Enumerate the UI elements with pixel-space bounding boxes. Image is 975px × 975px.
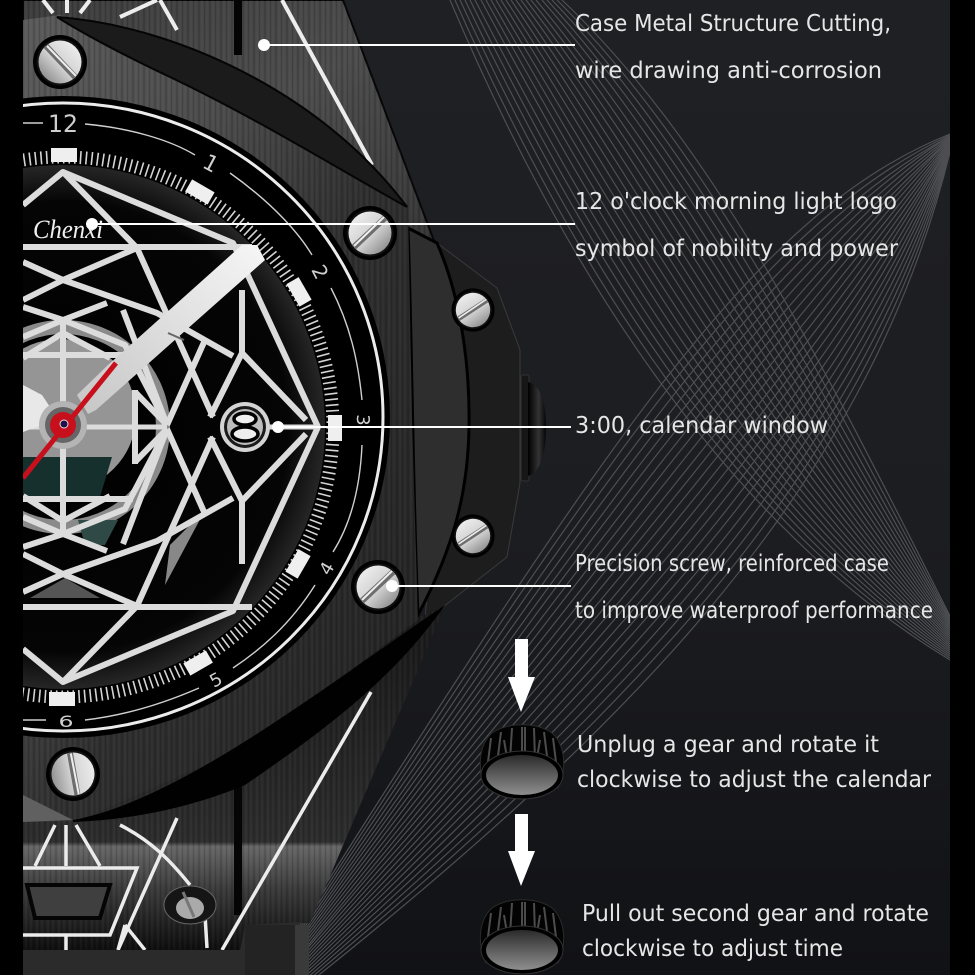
dial xyxy=(0,165,325,689)
case lower-left facet xyxy=(23,795,73,822)
hour markers xyxy=(49,148,342,706)
hour numerals: 4 xyxy=(315,559,339,579)
callout: logo: symbol of nobility and power xyxy=(575,236,899,262)
icon: crown first gear xyxy=(480,725,564,799)
callout: case structure: Case Metal Structure Cutting, xyxy=(575,11,891,37)
main case xyxy=(23,15,418,822)
callout: first gear: Unplug a gear and rotate it xyxy=(577,732,879,758)
hour numerals xyxy=(48,110,373,731)
background line band rising to the right xyxy=(300,134,950,975)
hour numerals: 12 xyxy=(48,110,78,138)
leader: logo xyxy=(86,218,575,230)
hour numerals: 2 xyxy=(306,261,334,283)
crown xyxy=(521,375,546,481)
right black strip xyxy=(950,0,975,975)
bezel xyxy=(0,96,390,738)
arrow: second gear xyxy=(508,814,535,886)
arrow: first gear xyxy=(508,639,535,712)
callout: second gear: clockwise to adjust time xyxy=(582,936,843,962)
top strap xyxy=(23,0,442,262)
minute ticks xyxy=(0,157,333,697)
strap screw xyxy=(164,886,216,924)
callout: case structure xyxy=(575,11,891,84)
callout: calendar window: 3:00, calendar window xyxy=(575,413,828,439)
callout: first gear: clockwise to adjust the calendar xyxy=(577,767,932,793)
skeleton movement xyxy=(0,327,205,598)
case screws xyxy=(33,35,498,811)
geometric dial lines xyxy=(23,172,318,682)
callout: second gear xyxy=(582,901,929,962)
bottom strap xyxy=(23,606,445,950)
bottom black wedge xyxy=(73,605,445,822)
date window xyxy=(220,402,270,452)
callout: first gear xyxy=(577,732,932,793)
outer case lug xyxy=(425,243,520,620)
callout: case structure: wire drawing anti-corrosion xyxy=(575,58,882,84)
bottom strap white lines xyxy=(23,692,371,950)
callout: second gear: Pull out second gear and rotate xyxy=(582,901,929,927)
hour numerals: 6 xyxy=(58,712,74,731)
hands xyxy=(23,245,265,478)
leader: case structure xyxy=(258,39,575,51)
left black strip xyxy=(0,0,23,975)
leader: screw xyxy=(386,580,571,592)
textured case panel xyxy=(408,228,469,615)
rubber strap base xyxy=(23,922,309,975)
background line band falling to the right xyxy=(450,0,950,660)
callout: precision screw xyxy=(575,551,933,624)
hour numerals: 5 xyxy=(206,668,226,692)
top black wedge xyxy=(57,17,407,207)
callout: logo: 12 o'clock morning light logo xyxy=(575,189,897,215)
hour numerals: 3 xyxy=(352,414,373,426)
strap window xyxy=(27,885,110,918)
icon: crown second gear xyxy=(480,900,564,974)
hour numerals: 1 xyxy=(198,150,222,179)
logo: Chenxi xyxy=(33,215,103,244)
callout: logo xyxy=(575,189,899,262)
leader: calendar window xyxy=(272,421,571,433)
callout: precision screw: to improve waterproof performance xyxy=(575,598,933,624)
callout: precision screw: Precision screw, reinforced case xyxy=(575,551,889,577)
chapter track xyxy=(23,123,362,720)
dial rim xyxy=(0,145,345,709)
